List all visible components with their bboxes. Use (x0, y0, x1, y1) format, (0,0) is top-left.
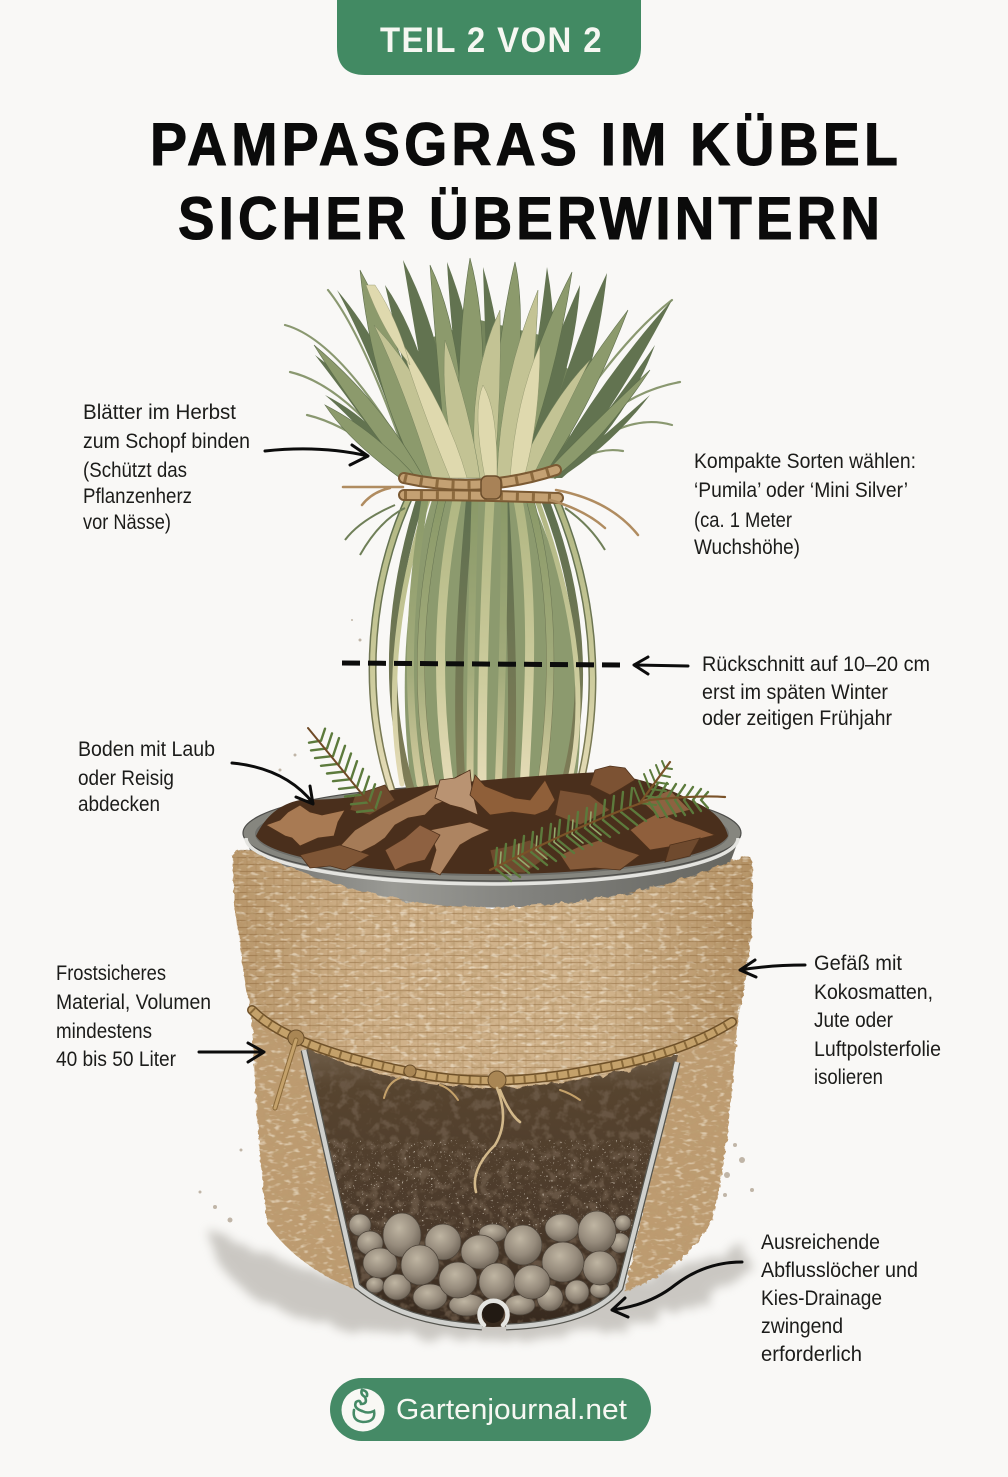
label: frost-proof material: mindestens (56, 1020, 152, 1043)
label: drainage: Ausreichende (761, 1231, 880, 1254)
cut-away: soil layer (300, 1040, 685, 1335)
dashed cut line (342, 663, 620, 665)
label: tie leaves (83, 401, 250, 534)
label: soil cover: oder Reisig (78, 767, 174, 790)
label: compact varieties: Kompakte Sorten wählen: (694, 450, 916, 473)
label: tie leaves: Blätter im Herbst (83, 401, 236, 424)
cut-away: metal pot wall with drainage hole (304, 1050, 677, 1327)
label: compact varieties: ‘Pumila’ oder ‘Mini Silver’ (694, 479, 908, 502)
burlap wrap around the pot (225, 845, 760, 1095)
title (150, 111, 902, 252)
arrow: tie leaves (265, 445, 368, 465)
title: PAMPASGRAS IM KÜBEL (150, 111, 902, 178)
label: drainage (761, 1231, 918, 1366)
title: SICHER ÜBERWINTERN (178, 185, 884, 252)
arrow: frost-proof material (199, 1043, 264, 1062)
evergreen twigs (308, 728, 725, 881)
label: tie leaves: zum Schopf binden (83, 430, 250, 453)
metal pot rim (243, 785, 741, 908)
label: insulation (814, 952, 941, 1089)
arrow: insulation (740, 960, 805, 977)
label: pruning: oder zeitigen Frühjahr (702, 707, 892, 730)
label: frost-proof material: 40 bis 50 Liter (56, 1048, 176, 1071)
label: insulation: Gefäß mit (814, 952, 902, 975)
label: soil cover: abdecken (78, 793, 160, 816)
pampas grass upper tuft (285, 258, 680, 478)
label: compact varieties (694, 450, 916, 559)
label: frost-proof material (56, 962, 211, 1071)
label: compact varieties: Wuchshöhe) (694, 536, 800, 559)
label: insulation: isolieren (814, 1066, 883, 1089)
header badge: part 2 of 2: TEIL 2 VON 2 (380, 21, 603, 60)
label: drainage: Kies-Drainage (761, 1287, 882, 1310)
pampas grass lower bundle (345, 500, 605, 794)
label: drainage: erforderlich (761, 1343, 862, 1366)
mulch of leaves under the plant (256, 766, 728, 875)
label: insulation: Jute oder (814, 1009, 893, 1032)
label: tie leaves: (Schützt das (83, 459, 187, 482)
label: drainage: zwingend (761, 1315, 843, 1338)
label: insulation: Luftpolsterfolie (814, 1038, 941, 1061)
label: pruning: Rückschnitt auf 10–20 cm (702, 653, 930, 676)
ground shadow and paint splatter (198, 619, 754, 1340)
label: soil cover: Boden mit Laub (78, 738, 215, 761)
footer badge: Gartenjournal.net: Gartenjournal.net (396, 1394, 627, 1426)
footer badge: Gartenjournal.net (330, 1378, 651, 1441)
cut-away: gravel drainage stones (349, 1211, 631, 1316)
rope around the burlap (252, 1010, 732, 1192)
twine tie around the tuft (343, 470, 638, 535)
arrow: soil cover (232, 763, 313, 804)
header badge: part 2 of 2 (337, 0, 641, 75)
label: drainage: Abflusslöcher und (761, 1259, 918, 1282)
label: frost-proof material: Material, Volumen (56, 991, 211, 1014)
label: compact varieties: (ca. 1 Meter (694, 509, 792, 532)
label: insulation: Kokosmatten, (814, 981, 933, 1004)
label: pruning (702, 653, 930, 730)
label: pruning: erst im späten Winter (702, 681, 888, 704)
label: tie leaves: vor Nässe) (83, 511, 171, 534)
arrow: drainage (612, 1262, 742, 1317)
lower burlap pieces beside the cut-away (245, 1015, 745, 1300)
label: frost-proof material: Frostsicheres (56, 962, 166, 985)
label: soil cover (78, 738, 215, 816)
arrow: cut height (634, 657, 688, 674)
label: tie leaves: Pflanzenherz (83, 485, 192, 508)
